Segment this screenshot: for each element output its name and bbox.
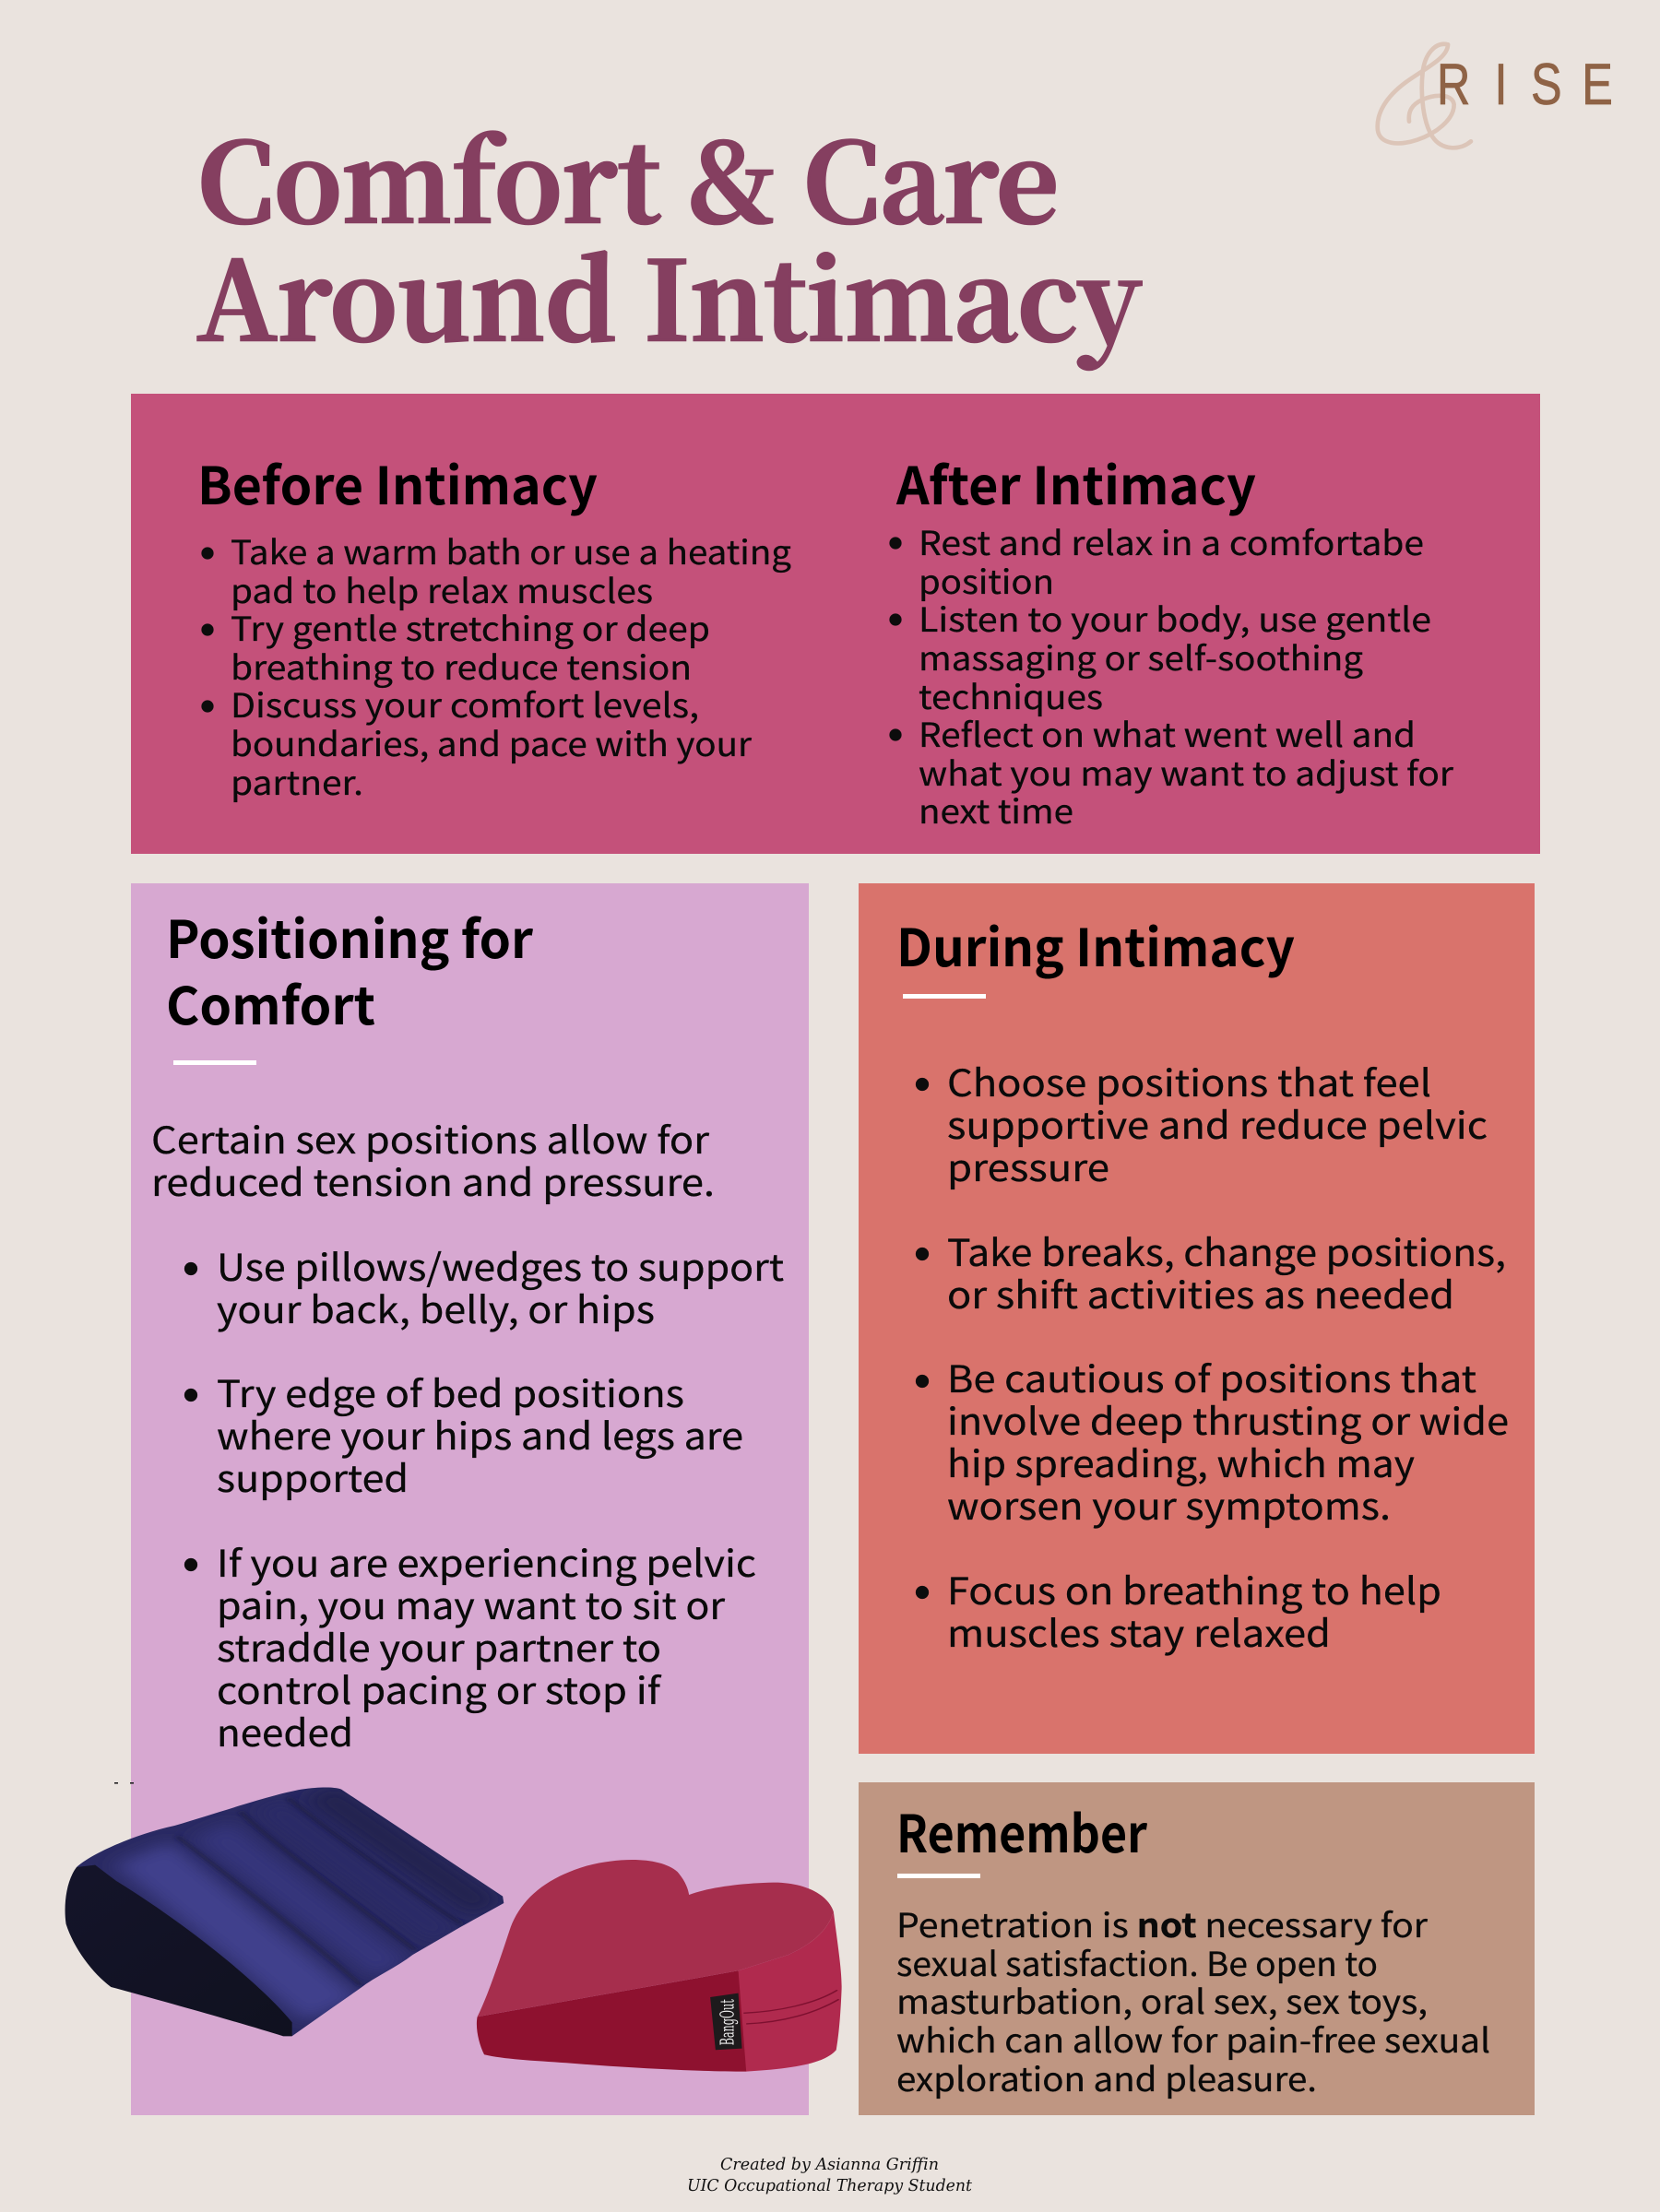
during list: involve deep thrusting or wide (947, 1392, 1509, 1446)
title (196, 97, 1142, 372)
during list: Take breaks, change positions, (947, 1224, 1506, 1277)
positioning list: needed (217, 1704, 353, 1757)
remember text: sexual satisfaction. Be open to (896, 1938, 1378, 1986)
during list: pressure (947, 1139, 1109, 1192)
after intimacy list: Rest and relax in a comfortabe (919, 517, 1424, 565)
before intimacy list: breathing to reduce tension (231, 642, 692, 690)
positioning list: Use pillows/wedges to support (217, 1238, 784, 1292)
after intimacy list: next time (919, 786, 1073, 834)
remember text: Penetration is not necessary for (896, 1899, 1429, 1947)
icon: red heart wedge cushion (477, 1860, 842, 2072)
before intimacy list: Take a warm bath or use a heating (231, 526, 791, 574)
during list: muscles stay relaxed (947, 1604, 1331, 1658)
during list: Focus on breathing to help (947, 1562, 1441, 1615)
positioning intro text (151, 1111, 715, 1207)
remember text: exploration and pleasure. (896, 2053, 1317, 2101)
after intimacy list (889, 517, 1454, 834)
positioning heading: Positioning for (166, 899, 534, 974)
positioning intro text: reduced tension and pressure. (151, 1153, 715, 1207)
before intimacy list: Try gentle stretching or deep (231, 603, 710, 651)
before intimacy heading: Before Intimacy (197, 445, 598, 520)
during list: Be cautious of positions that (947, 1350, 1476, 1403)
title: Around Intimacy (196, 215, 1142, 372)
positioning intro text: Certain sex positions allow for (151, 1111, 710, 1165)
during heading: During Intimacy (896, 907, 1295, 982)
panel: before and after intimacy (131, 394, 1540, 854)
footer credit: Created by Asianna Griffin (720, 2155, 939, 2174)
positioning list: If you are experiencing pelvic (217, 1534, 756, 1588)
panel: remember (859, 1782, 1535, 2115)
positioning list: control pacing or stop if (217, 1662, 662, 1715)
after intimacy list: position (919, 556, 1054, 604)
panel: positioning for comfort (131, 883, 809, 2115)
after intimacy list: Reflect on what went well and (919, 709, 1416, 757)
title: Comfort & Care (197, 97, 1059, 254)
before intimacy list: boundaries, and pace with your (231, 718, 753, 766)
positioning list: Try edge of bed positions (217, 1365, 684, 1418)
remember text (896, 1899, 1490, 2101)
during list (916, 1054, 1509, 1658)
logo: RISE (1378, 44, 1613, 148)
positioning list: supported (217, 1449, 409, 1503)
after intimacy list: massaging or self-soothing (919, 633, 1363, 680)
during list: or shift activities as needed (947, 1266, 1454, 1319)
positioning heading (166, 899, 534, 1040)
remember heading: Remember (896, 1793, 1148, 1868)
during list: worsen your symptoms. (947, 1477, 1391, 1531)
positioning list: straddle your partner to (217, 1619, 661, 1673)
positioning list: where your hips and legs are (217, 1407, 743, 1461)
positioning list: your back, belly, or hips (217, 1281, 655, 1334)
before intimacy list (201, 526, 791, 805)
positioning list: pain, you may want to sit or (217, 1577, 726, 1630)
panel: during intimacy (859, 883, 1535, 1754)
after intimacy list: what you may want to adjust for (919, 748, 1454, 796)
logo wordmark: RISE (1437, 53, 1613, 117)
after intimacy heading: After Intimacy (895, 445, 1256, 520)
positioning list (184, 1238, 784, 1757)
positioning heading: Comfort (166, 965, 375, 1040)
footer credit: UIC Occupational Therapy Student (687, 2176, 973, 2195)
before intimacy list: Discuss your comfort levels, (231, 680, 699, 727)
remember text: which can allow for pain-free sexual (896, 2015, 1490, 2063)
before intimacy list: partner. (231, 757, 363, 805)
during list: supportive and reduce pelvic (947, 1096, 1488, 1150)
after intimacy list: Listen to your body, use gentle (919, 594, 1431, 642)
during list: hip spreading, which may (947, 1435, 1415, 1488)
logo script ampersand (1378, 44, 1471, 148)
remember text: masturbation, oral sex, sex toys, (896, 1976, 1428, 2024)
after intimacy list: techniques (919, 671, 1103, 719)
before intimacy list: pad to help relax muscles (231, 565, 653, 613)
during list: Choose positions that feel (947, 1054, 1431, 1107)
icon: navy inflatable wedge cushion (65, 1788, 504, 2036)
icon: small stray marks (114, 1782, 134, 1784)
icon: red heart wedge cushion: BangOut (717, 1999, 739, 2045)
footer credit (687, 2155, 973, 2195)
